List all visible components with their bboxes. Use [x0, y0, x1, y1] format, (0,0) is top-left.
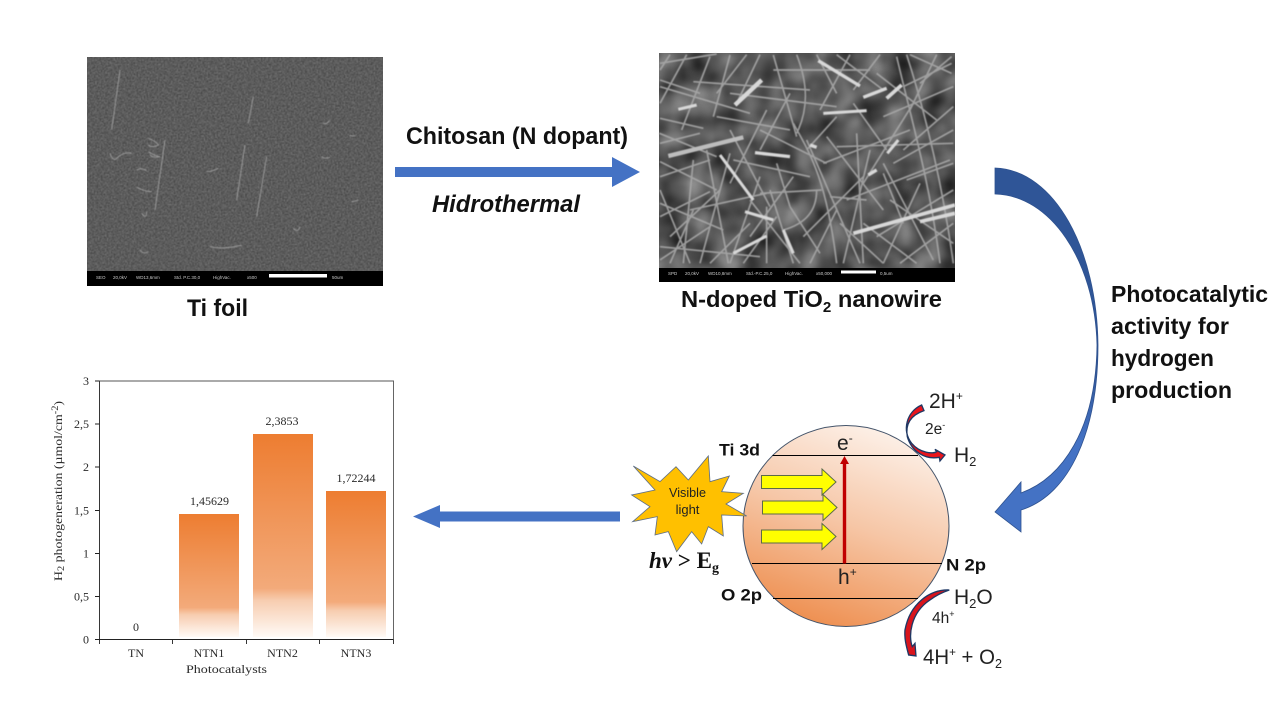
panel: Ti foil SEM micrograph: x500 [247, 275, 257, 280]
y axis tick labels: 0,5 [74, 590, 89, 604]
y axis tick labels: 3 [83, 374, 89, 388]
arrow: mechanism to chart [413, 505, 620, 528]
text: photocatalytic activity for hydrogen production: Photocatalytic [1111, 281, 1268, 307]
panel: N-doped TiO2 nanowire SEM micrograph: SPD [668, 271, 678, 276]
reaction: water oxidation: 4H [923, 646, 950, 669]
bar: NTN1 [179, 514, 239, 637]
text: photocatalytic activity for hydrogen production: activity for [1111, 313, 1229, 339]
label: Ti foil: Ti foil [187, 295, 248, 322]
panel: N-doped TiO2 nanowire SEM micrograph: HighVac. [785, 271, 803, 276]
labels: charge carriers [837, 431, 857, 589]
text: photocatalytic activity for hydrogen production: production [1111, 377, 1232, 403]
panel: N-doped TiO2 nanowire SEM micrograph [659, 53, 955, 282]
reaction: hydrogen evolution: H [954, 444, 969, 467]
label: N-doped TiO2 nanowire: N-doped TiO [681, 286, 822, 312]
value labels: 2,3853 [266, 414, 298, 428]
reaction: water oxidation: 2 [969, 596, 976, 611]
y axis title: -2 [50, 406, 60, 414]
panel: Ti foil SEM micrograph [87, 57, 383, 286]
y axis tick labels: 2,5 [74, 417, 89, 431]
y axis title: ) [51, 401, 65, 406]
labels: energy levels: N 2p [946, 556, 986, 574]
y axis title: 2 [56, 566, 66, 571]
category labels: TN [128, 646, 144, 660]
panel: photocatalysis mechanism diagram [632, 389, 1002, 671]
y axis title: photogeneration (µmol/cm [51, 413, 65, 566]
label: N-doped TiO2 nanowire: nanowire [831, 286, 942, 312]
category labels: NTN1 [194, 646, 224, 660]
x axis title: Photocatalysts [186, 662, 267, 676]
y axis tick labels [74, 374, 89, 646]
y axis title: H [51, 572, 65, 581]
label: N-doped TiO2 nanowire: 2 [823, 299, 831, 316]
reaction: water oxidation: 4h [932, 610, 949, 627]
reaction: water oxidation: H [954, 586, 969, 609]
bar: NTN2 [253, 434, 313, 637]
category labels: NTN3 [341, 646, 371, 660]
category labels [128, 646, 371, 660]
semiconductor particle [743, 426, 949, 626]
chart axes [95, 381, 394, 644]
text: photocatalytic activity for hydrogen production: hydrogen [1111, 345, 1214, 371]
value labels: 1,72244 [336, 471, 376, 485]
text: photocatalytic activity for hydrogen production [1111, 281, 1268, 403]
labels: energy levels: Ti 3d [719, 440, 760, 460]
panel: N-doped TiO2 nanowire SEM micrograph: WD10,8mm [708, 271, 732, 276]
value labels: 1,45629 [190, 494, 229, 508]
labels: charge carriers: - [849, 431, 853, 445]
energy levels [752, 456, 942, 598]
reaction: water oxidation: 2 [995, 656, 1002, 671]
value labels: 0 [133, 620, 139, 634]
y axis tick labels: 1 [83, 546, 89, 560]
formula: photon energy: hv > E [649, 548, 712, 573]
y axis tick labels: 1,5 [74, 504, 89, 518]
arrows: yellow light rays [762, 469, 837, 550]
reaction: hydrogen evolution: 2 [969, 454, 976, 469]
arrow: foil to nanowire [395, 157, 640, 187]
heading: chitosan dopant: Chitosan (N dopant) [406, 123, 628, 150]
value labels [133, 414, 376, 634]
text: hydrothermal method: Hidrothermal [432, 191, 581, 218]
reaction: water oxidation: + [949, 645, 956, 659]
panel: Ti foil SEM micrograph: Std. P.C.30,0 [174, 275, 201, 280]
reaction: water oxidation: + [949, 609, 955, 619]
reaction: hydrogen evolution [906, 389, 976, 469]
panel: Ti foil SEM micrograph: HighVac. [213, 275, 231, 280]
reaction: hydrogen evolution: + [956, 389, 963, 403]
labels: charge carriers: h [838, 566, 850, 589]
panel: Ti foil SEM micrograph: WD13,6mm [136, 275, 160, 280]
panel: N-doped TiO2 nanowire SEM micrograph: 0,5um [880, 271, 893, 276]
panel: Ti foil SEM micrograph: SEO [96, 275, 106, 280]
reaction: water oxidation: O [976, 586, 993, 609]
arrow: curved arrow to mechanism [995, 168, 1098, 532]
labels: energy levels [719, 440, 986, 604]
labels: charge carriers: + [850, 565, 857, 579]
reaction: hydrogen evolution: 2H [929, 390, 956, 413]
icon: visible light burst: light [676, 502, 700, 517]
bar: NTN3 [326, 491, 386, 637]
labels: energy levels: O 2p [721, 586, 762, 604]
reaction: water oxidation: + O [956, 646, 995, 669]
y axis tick labels: 0 [83, 632, 89, 646]
arrow: electron excitation [840, 456, 849, 564]
panel: Ti foil SEM micrograph: 20,0kV [113, 275, 127, 280]
reaction: hydrogen evolution: - [942, 420, 945, 430]
panel: Ti foil SEM micrograph: 50um [332, 275, 344, 280]
reaction: water oxidation [905, 586, 1002, 671]
formula: photon energy: g [712, 561, 719, 576]
category labels: NTN2 [267, 646, 298, 660]
panel: N-doped TiO2 nanowire SEM micrograph: 20,0kV [685, 271, 699, 276]
icon: visible light burst: Visible [669, 485, 706, 500]
reaction: hydrogen evolution: 2e [925, 421, 942, 438]
labels: charge carriers: e [837, 432, 849, 455]
icon: visible light burst [632, 456, 747, 552]
panel: N-doped TiO2 nanowire SEM micrograph: x50,000 [816, 271, 833, 276]
panel: N-doped TiO2 nanowire SEM micrograph: Std.-P.C.25,0 [746, 271, 773, 276]
bar chart: H2 photogeneration [50, 374, 394, 676]
y axis tick labels: 2 [83, 460, 89, 474]
